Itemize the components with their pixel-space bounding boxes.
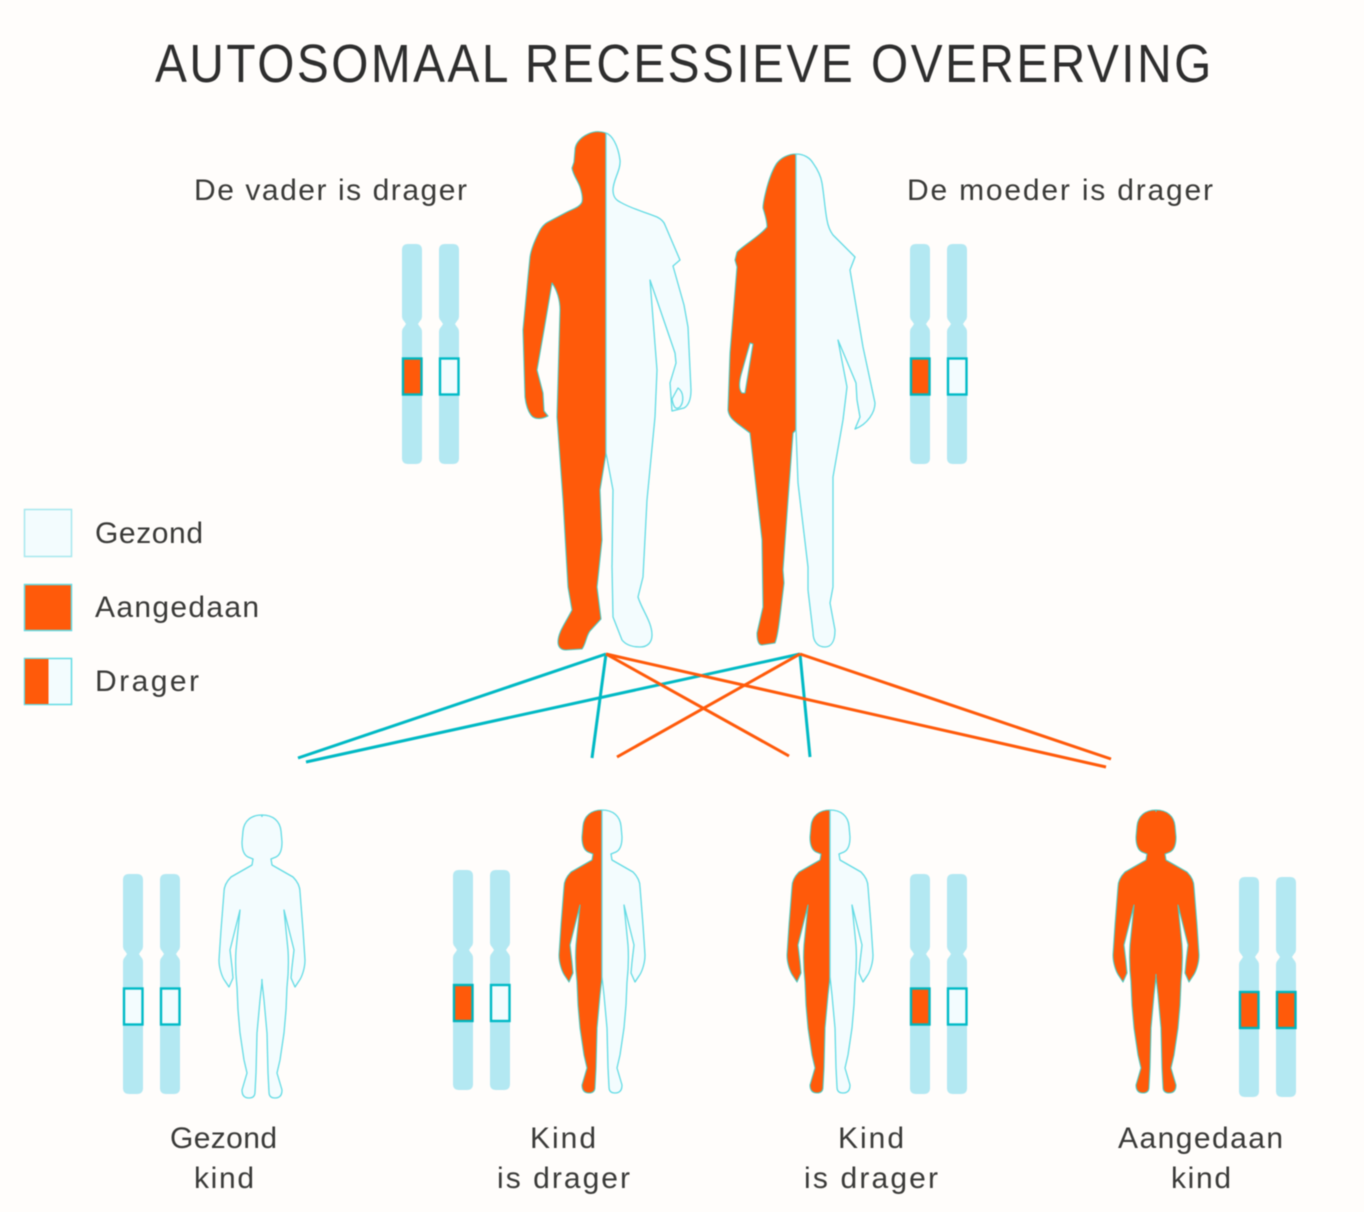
label: carrier child (804, 1122, 938, 1195)
legend item: carrier: Drager (95, 665, 199, 698)
inheritance lines: orange affected alleles (606, 654, 1111, 767)
chromosomes: father (402, 244, 459, 464)
child 4: affected (1113, 810, 1296, 1195)
label: healthy child: Gezond (170, 1122, 277, 1155)
legend item: affected: Aangedaan (95, 591, 259, 624)
label: carrier child: Kind (838, 1122, 904, 1155)
figure: carrier child (787, 810, 873, 1093)
label: carrier child: is drager (497, 1162, 630, 1195)
legend item: healthy: Gezond (95, 517, 203, 550)
label: carrier child: is drager (804, 1162, 938, 1195)
legend item: affected (24, 584, 259, 630)
figure: father, carrier (523, 132, 691, 650)
label: father is carrier: De vader is drager (194, 174, 467, 207)
label: affected child: kind (1171, 1162, 1231, 1195)
legend item: healthy (24, 510, 203, 556)
figure: mother, carrier (728, 154, 875, 647)
chromosomes: child 1 (123, 874, 180, 1094)
label: carrier child: Kind (530, 1122, 596, 1155)
inheritance lines: teal healthy alleles (298, 654, 810, 762)
figure: carrier child (559, 810, 645, 1093)
label: affected child: Aangedaan (1118, 1122, 1283, 1155)
child 1: healthy (123, 815, 305, 1195)
label: healthy child: kind (194, 1162, 254, 1195)
label: affected child (1118, 1122, 1283, 1195)
child 2: carrier (453, 810, 645, 1195)
legend (24, 510, 259, 704)
chromosomes: child 4 (1239, 877, 1296, 1097)
label: healthy child (170, 1122, 277, 1195)
chromosomes: child 3 (910, 874, 967, 1094)
title: AUTOSOMAAL RECESSIEVE OVERERVING (155, 33, 1214, 94)
chromosomes: mother (910, 244, 967, 464)
chromosomes: child 2 (453, 870, 510, 1090)
figure: affected child (1113, 810, 1199, 1093)
legend item: carrier (24, 658, 199, 704)
child 3: carrier (787, 810, 967, 1195)
label: carrier child (497, 1122, 630, 1195)
label: mother is carrier: De moeder is drager (907, 174, 1213, 207)
figure: healthy child (219, 815, 305, 1098)
